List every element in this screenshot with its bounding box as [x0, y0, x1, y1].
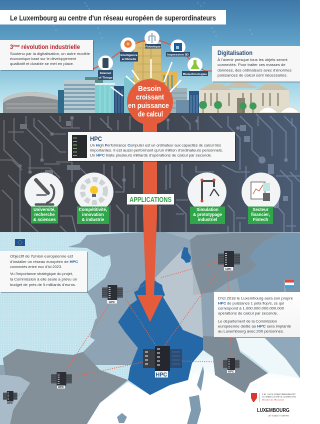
server: west: HPC	[58, 385, 64, 389]
server: north-west	[102, 285, 123, 304]
server: far west: HPC	[7, 401, 13, 405]
eastern light land	[265, 338, 300, 378]
panel: 3ème révolution industrielle: économique basé sur le développement	[10, 56, 77, 61]
title band: Le Luxembourg au centre d'un réseau européen de superordinateurs	[10, 14, 216, 22]
circle: growing computing need: de calcul	[138, 110, 163, 118]
node: robotics	[144, 30, 161, 48]
main orange arrow	[137, 118, 163, 322]
application: simulation	[188, 172, 226, 224]
server: Luxembourg central: HPC	[156, 372, 167, 378]
panel: 3ème révolution industrielle: 3	[10, 45, 13, 51]
server: Luxembourg central	[143, 346, 182, 378]
bridge	[258, 107, 300, 113]
application: université: recherche	[34, 212, 55, 217]
western light land	[0, 375, 30, 424]
panel: EU objective: Objectif de l'Union européenne est	[10, 254, 74, 258]
panel: digitalisation: données, des ordinateurs avec d'énormes	[218, 68, 292, 72]
panel: EU objective	[0, 251, 88, 293]
icon: server rack	[72, 135, 87, 158]
title band	[0, 10, 226, 24]
application: simulation: industriel	[198, 217, 217, 222]
icon: finance documents	[251, 182, 270, 201]
inland sea right	[236, 338, 300, 378]
panel: EU objective: Vu l'importance stratégique du projet,	[10, 271, 73, 276]
circle: growing computing need	[127, 79, 173, 125]
node: 3D printing: Impression 3D	[167, 52, 189, 56]
towers right	[161, 72, 200, 113]
panel: HPC definition: HPC	[90, 137, 103, 143]
sea	[0, 232, 300, 424]
application: secteur financier: Fintech	[253, 217, 269, 222]
panel: Luxembourg HPC: opérations de calcul par seconde.	[218, 310, 278, 316]
panel: 3ème révolution industrielle: révolution industrielle	[20, 45, 81, 51]
south-west dark land	[3, 349, 128, 424]
logo: government of Luxembourg: DU GRAND-DUCHÉ DE LUXEMBOURG	[262, 396, 297, 398]
node: biotechnologies: Biotechnologies	[183, 72, 207, 76]
panel: HPC definition: Un HPC traite plusieurs milliards d'opérations de calcul par seconde.	[90, 152, 212, 158]
panel: digitalisation: connectés. Pour traiter ces masses de	[218, 62, 286, 67]
application: simulation: Simulation	[197, 207, 219, 212]
server: north-west: HPC	[109, 300, 115, 304]
yellow central tower	[134, 42, 161, 88]
panel: EU objective: la Commission à elle seule a prévu un	[10, 276, 77, 282]
logo: Luxembourg brand	[257, 408, 290, 418]
circuit board band	[0, 113, 300, 232]
orange connector through technologies	[93, 38, 213, 71]
decorative data particles in the sky	[53, 2, 253, 39]
network links	[17, 262, 231, 396]
server: far west	[3, 391, 17, 405]
server: north-east: HPC	[226, 267, 231, 271]
application: secteur financier: Secteur	[253, 207, 269, 212]
server: west	[51, 372, 72, 389]
label: applications	[127, 194, 174, 204]
southern sea	[87, 350, 300, 424]
Luxembourg enlarged	[118, 278, 203, 395]
application: université	[24, 172, 64, 224]
islands	[197, 366, 204, 391]
icon: microscope	[36, 180, 54, 204]
node: artificial intelligence: artificielle	[122, 57, 136, 61]
application: secteur financier	[242, 172, 280, 224]
label: applications: APPLICATIONS	[130, 197, 172, 204]
panel: EU objective: d'installer un réseau européen de HPC	[10, 259, 78, 264]
node: internet of things: Internet	[100, 71, 111, 75]
circle: growing computing need: Besoin	[138, 84, 161, 93]
enlargement cone	[155, 247, 203, 338]
circle: growing computing need: croissant	[136, 92, 164, 102]
panel: EU objective: connectés entre eux d'ici 2023.	[10, 264, 62, 269]
application: secteur financier: financier,	[251, 212, 270, 217]
white pointers to central circle	[111, 59, 181, 96]
panel: 3ème révolution industrielle: Soutenu par la digitalisation, un autre modèle	[10, 51, 90, 56]
logo: Luxembourg brand: LUXEMBOURG	[257, 408, 290, 414]
logo: government of Luxembourg: LE GOUVERNEMENT	[262, 394, 296, 396]
panel: 3ème révolution industrielle	[0, 40, 94, 71]
server: south-east	[223, 358, 240, 374]
panel: digitalisation: À l'avenir presque tous les objets seront	[218, 57, 288, 62]
panel: Luxembourg HPC: HPC de puissance 1 péta flop/s, ce qui	[218, 300, 284, 306]
panel: Luxembourg HPC: correspond à 1.000.000.000.000.000	[218, 306, 285, 310]
panel: 3ème révolution industrielle: qualitatif et durable se met en place.	[10, 61, 74, 66]
south-central darker land	[203, 336, 270, 393]
icon: Luxembourg flag	[285, 280, 294, 293]
node: robotics: Robotique	[145, 44, 161, 48]
Luxembourg small	[181, 247, 191, 263]
icon: EU flag	[15, 239, 25, 253]
application: compétitivité: Compétitivité,	[79, 207, 107, 212]
circle: growing computing need: en puissance	[128, 101, 169, 110]
panel: digitalisation: Digitalisation	[218, 50, 253, 57]
icon: robot arm	[201, 179, 219, 202]
palace	[199, 80, 289, 113]
panel: Luxembourg HPC: au Luxembourg avec 200 personnes.	[218, 328, 284, 334]
panel: HPC definition: Un High Performance Computer est un ordinateur aux capacités de calcul très	[90, 142, 221, 148]
logo: government of Luxembourg	[251, 393, 297, 402]
node: artificial intelligence: Intelligence	[120, 53, 138, 57]
panel: Luxembourg HPC: D'ici 2018 le Luxembourg aura son propre	[218, 296, 293, 300]
panel: Luxembourg HPC: Le département de la Commission	[218, 318, 277, 324]
application: compétitivité	[74, 172, 114, 224]
application: compétitivité: innovation	[82, 212, 104, 217]
panel: HPC definition: importantes. Il est aussi performant qu'un million d'ordinateurs personnels.	[90, 148, 223, 152]
north-east blue-grey waters	[237, 233, 300, 292]
node: internet of things	[98, 56, 113, 80]
cityscape	[3, 42, 300, 113]
northern lighter land	[145, 232, 300, 240]
node: artificial intelligence	[120, 38, 138, 62]
trees	[199, 101, 257, 113]
node: 3D printing	[166, 40, 190, 56]
application: simulation: & prototypage	[193, 212, 223, 217]
panel: EU objective: budget de près de 5 milliards d'euros.	[10, 282, 76, 287]
logo: Luxembourg brand: LET'S MAKE IT HAPPEN	[268, 414, 290, 418]
mainland	[0, 232, 300, 375]
panel: 3ème révolution industrielle: ème	[13, 44, 20, 48]
panel: digitalisation: puissances de calcul sont nécessaires.	[218, 72, 288, 78]
panel: Luxembourg HPC	[214, 292, 300, 337]
node: biotechnologies	[182, 58, 208, 76]
dome building	[3, 92, 58, 113]
server: south-east: HPC	[228, 370, 234, 374]
icon: gear and bulb	[82, 180, 106, 202]
sky background	[0, 0, 300, 114]
eastern region	[190, 233, 280, 295]
application: compétitivité: & industrie	[82, 217, 105, 222]
server: north-east	[218, 251, 240, 271]
application: université: & sciences	[33, 217, 56, 222]
application: université: Université,	[34, 207, 55, 212]
node: internet of things: of Things	[99, 76, 113, 80]
towers left	[58, 77, 134, 113]
panel: Luxembourg HPC: européenne dédié au HPC sera implanté	[218, 324, 291, 328]
panel: HPC definition	[68, 132, 236, 162]
panel: digitalisation	[212, 46, 300, 82]
logo: government of Luxembourg: Ministère de l'Économie	[262, 398, 284, 401]
map of Europe	[0, 232, 300, 424]
